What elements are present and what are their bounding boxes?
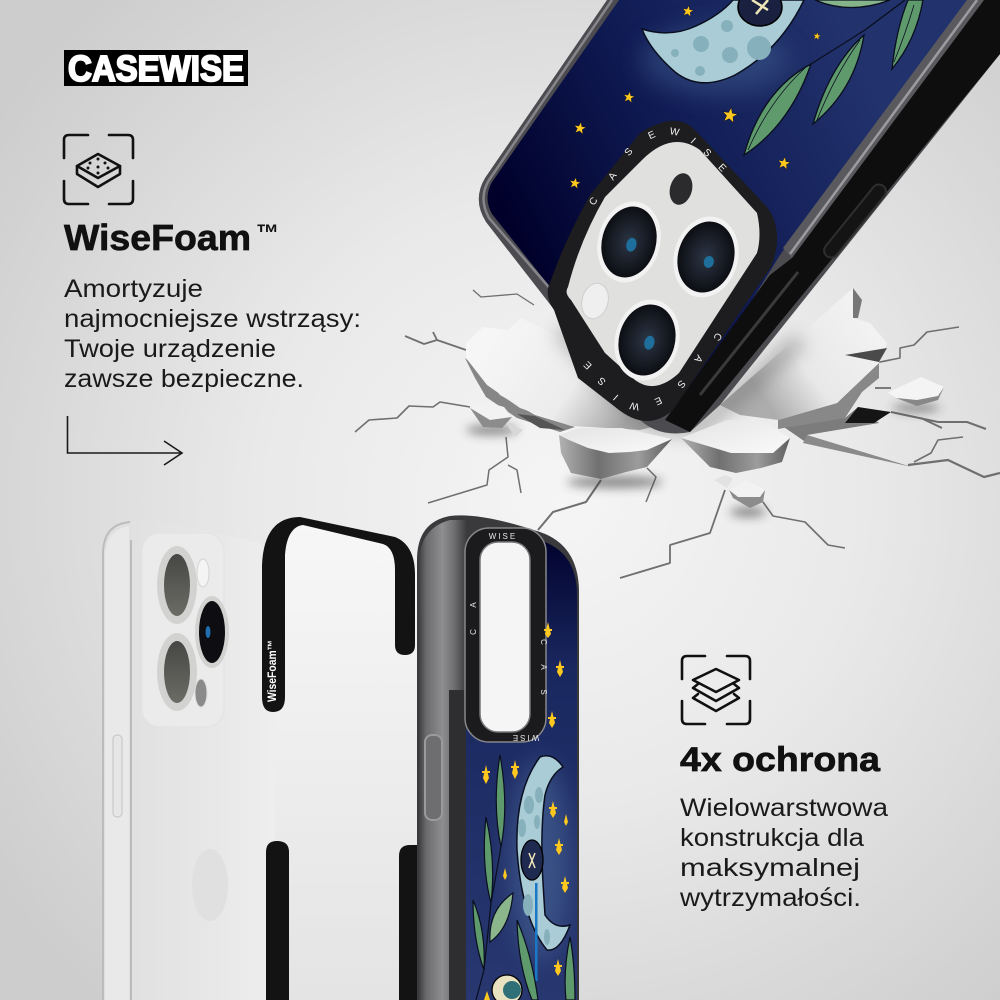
text block: WiseFoam description <box>64 275 361 393</box>
phone case: front view <box>417 515 579 1000</box>
grey wedge <box>803 435 912 467</box>
text block: 4x ochrona description: maksymalnej <box>680 854 860 882</box>
ring lettering: C <box>539 639 548 645</box>
stars <box>569 5 821 189</box>
camera ring <box>465 528 546 742</box>
silver highlight <box>790 0 977 254</box>
navy back <box>466 530 577 1000</box>
silver edge <box>783 0 984 264</box>
microphone <box>195 679 207 707</box>
band reflection <box>700 272 798 395</box>
side button <box>821 182 889 260</box>
ring lettering: E <box>652 394 663 407</box>
ring lettering: E <box>647 129 658 142</box>
side strip <box>105 526 129 1000</box>
text block: WiseFoam description: najmocniejsze wstrząsy: <box>64 305 361 333</box>
lower left liner <box>266 841 289 1000</box>
phone case: drop impact <box>479 0 1000 434</box>
ground shadows <box>466 404 940 517</box>
white phone <box>102 521 275 1000</box>
moon glow <box>640 25 790 95</box>
case shell <box>417 515 579 1000</box>
crack lines <box>355 290 1000 578</box>
left slab <box>465 318 660 432</box>
icon: layers <box>682 656 750 724</box>
lens 2 <box>664 209 748 305</box>
text block: WiseFoam description: Twoje urządzenie <box>64 335 276 363</box>
ring lettering: S <box>674 378 687 390</box>
flash <box>197 559 209 587</box>
side button <box>425 735 442 820</box>
heading: WiseFoam: WiseFoam <box>64 217 251 258</box>
foam gap panel <box>275 522 418 1000</box>
left edge highlight <box>484 0 612 300</box>
leaves <box>744 0 923 155</box>
text block: 4x ochrona description: Wielowarstwowa <box>680 794 888 822</box>
heading: WiseFoam: ™ <box>256 220 279 247</box>
lower dark side <box>449 690 466 1000</box>
ring lettering: A <box>469 602 478 608</box>
ring lettering <box>469 532 548 742</box>
right slab <box>720 288 887 429</box>
WiseFoam liner <box>262 517 418 1000</box>
rubble stones <box>470 377 944 508</box>
ring lettering: S <box>596 374 608 387</box>
center right block <box>681 420 790 473</box>
heading: 4x ochrona: 4x ochrona <box>680 741 881 779</box>
ring lettering: S <box>701 147 713 160</box>
liner label: WiseFoam™ <box>265 640 279 702</box>
lens 3 <box>605 292 689 388</box>
ring lettering: E <box>582 358 594 371</box>
text block: 4x ochrona description: wytrzymałości. <box>679 884 861 912</box>
ring lettering: I <box>612 392 621 402</box>
upper liner <box>262 517 415 712</box>
arrow <box>68 416 182 465</box>
lens <box>157 633 197 711</box>
text block: WiseFoam description: zawsze bezpieczne. <box>64 365 304 393</box>
phone contact shadow <box>560 330 800 428</box>
moon illustration <box>517 756 570 950</box>
ring lettering: I <box>688 136 697 146</box>
text block: 4x ochrona description: konstrukcja dla <box>680 824 864 852</box>
dark fracture <box>845 407 891 423</box>
icon: foam <box>64 135 133 204</box>
camera plate <box>567 142 760 386</box>
text block: WiseFoam description: Amortyzuje <box>64 275 203 303</box>
lens <box>157 546 197 624</box>
navy back <box>488 0 967 400</box>
ring lettering: A <box>691 353 704 365</box>
ring lettering: C <box>710 330 724 343</box>
ring lettering: C <box>469 629 478 635</box>
camera plateau <box>142 533 224 727</box>
ring lettering: E <box>716 162 728 175</box>
phone body <box>102 521 275 1000</box>
side button <box>113 735 122 817</box>
lens <box>195 596 229 668</box>
ring lettering: S <box>623 146 636 158</box>
right fracture hole <box>778 407 879 443</box>
ring lettering: C <box>587 195 601 208</box>
side band <box>419 520 466 1000</box>
ring lettering: A <box>539 664 548 670</box>
ring lettering <box>582 126 728 412</box>
center left block <box>559 428 672 479</box>
lower right liner <box>399 845 418 1000</box>
logo ghost <box>192 849 228 921</box>
ring lettering: WISE <box>489 532 517 541</box>
sensor <box>666 171 696 207</box>
ring lettering: W <box>669 126 681 139</box>
leaves <box>473 755 575 1000</box>
frame edge <box>103 522 131 1000</box>
brand logo: CASEWISE <box>68 48 244 89</box>
text block: 4x ochrona description <box>679 794 888 912</box>
stars <box>482 622 569 1000</box>
cracked ground <box>355 288 1000 578</box>
bottom eye <box>492 975 522 1000</box>
flash <box>578 280 612 322</box>
ring lettering: WISE <box>511 733 539 742</box>
moon glow <box>510 760 570 960</box>
camera ring <box>548 121 777 421</box>
tear line <box>535 883 538 981</box>
ring lettering: W <box>628 399 640 412</box>
black side band <box>665 0 1000 432</box>
case shell <box>479 0 1000 434</box>
camera window <box>480 542 530 732</box>
ring lettering: A <box>607 170 620 182</box>
lens 1 <box>588 194 670 290</box>
moon illustration <box>642 0 804 83</box>
ring lettering: S <box>539 689 548 695</box>
